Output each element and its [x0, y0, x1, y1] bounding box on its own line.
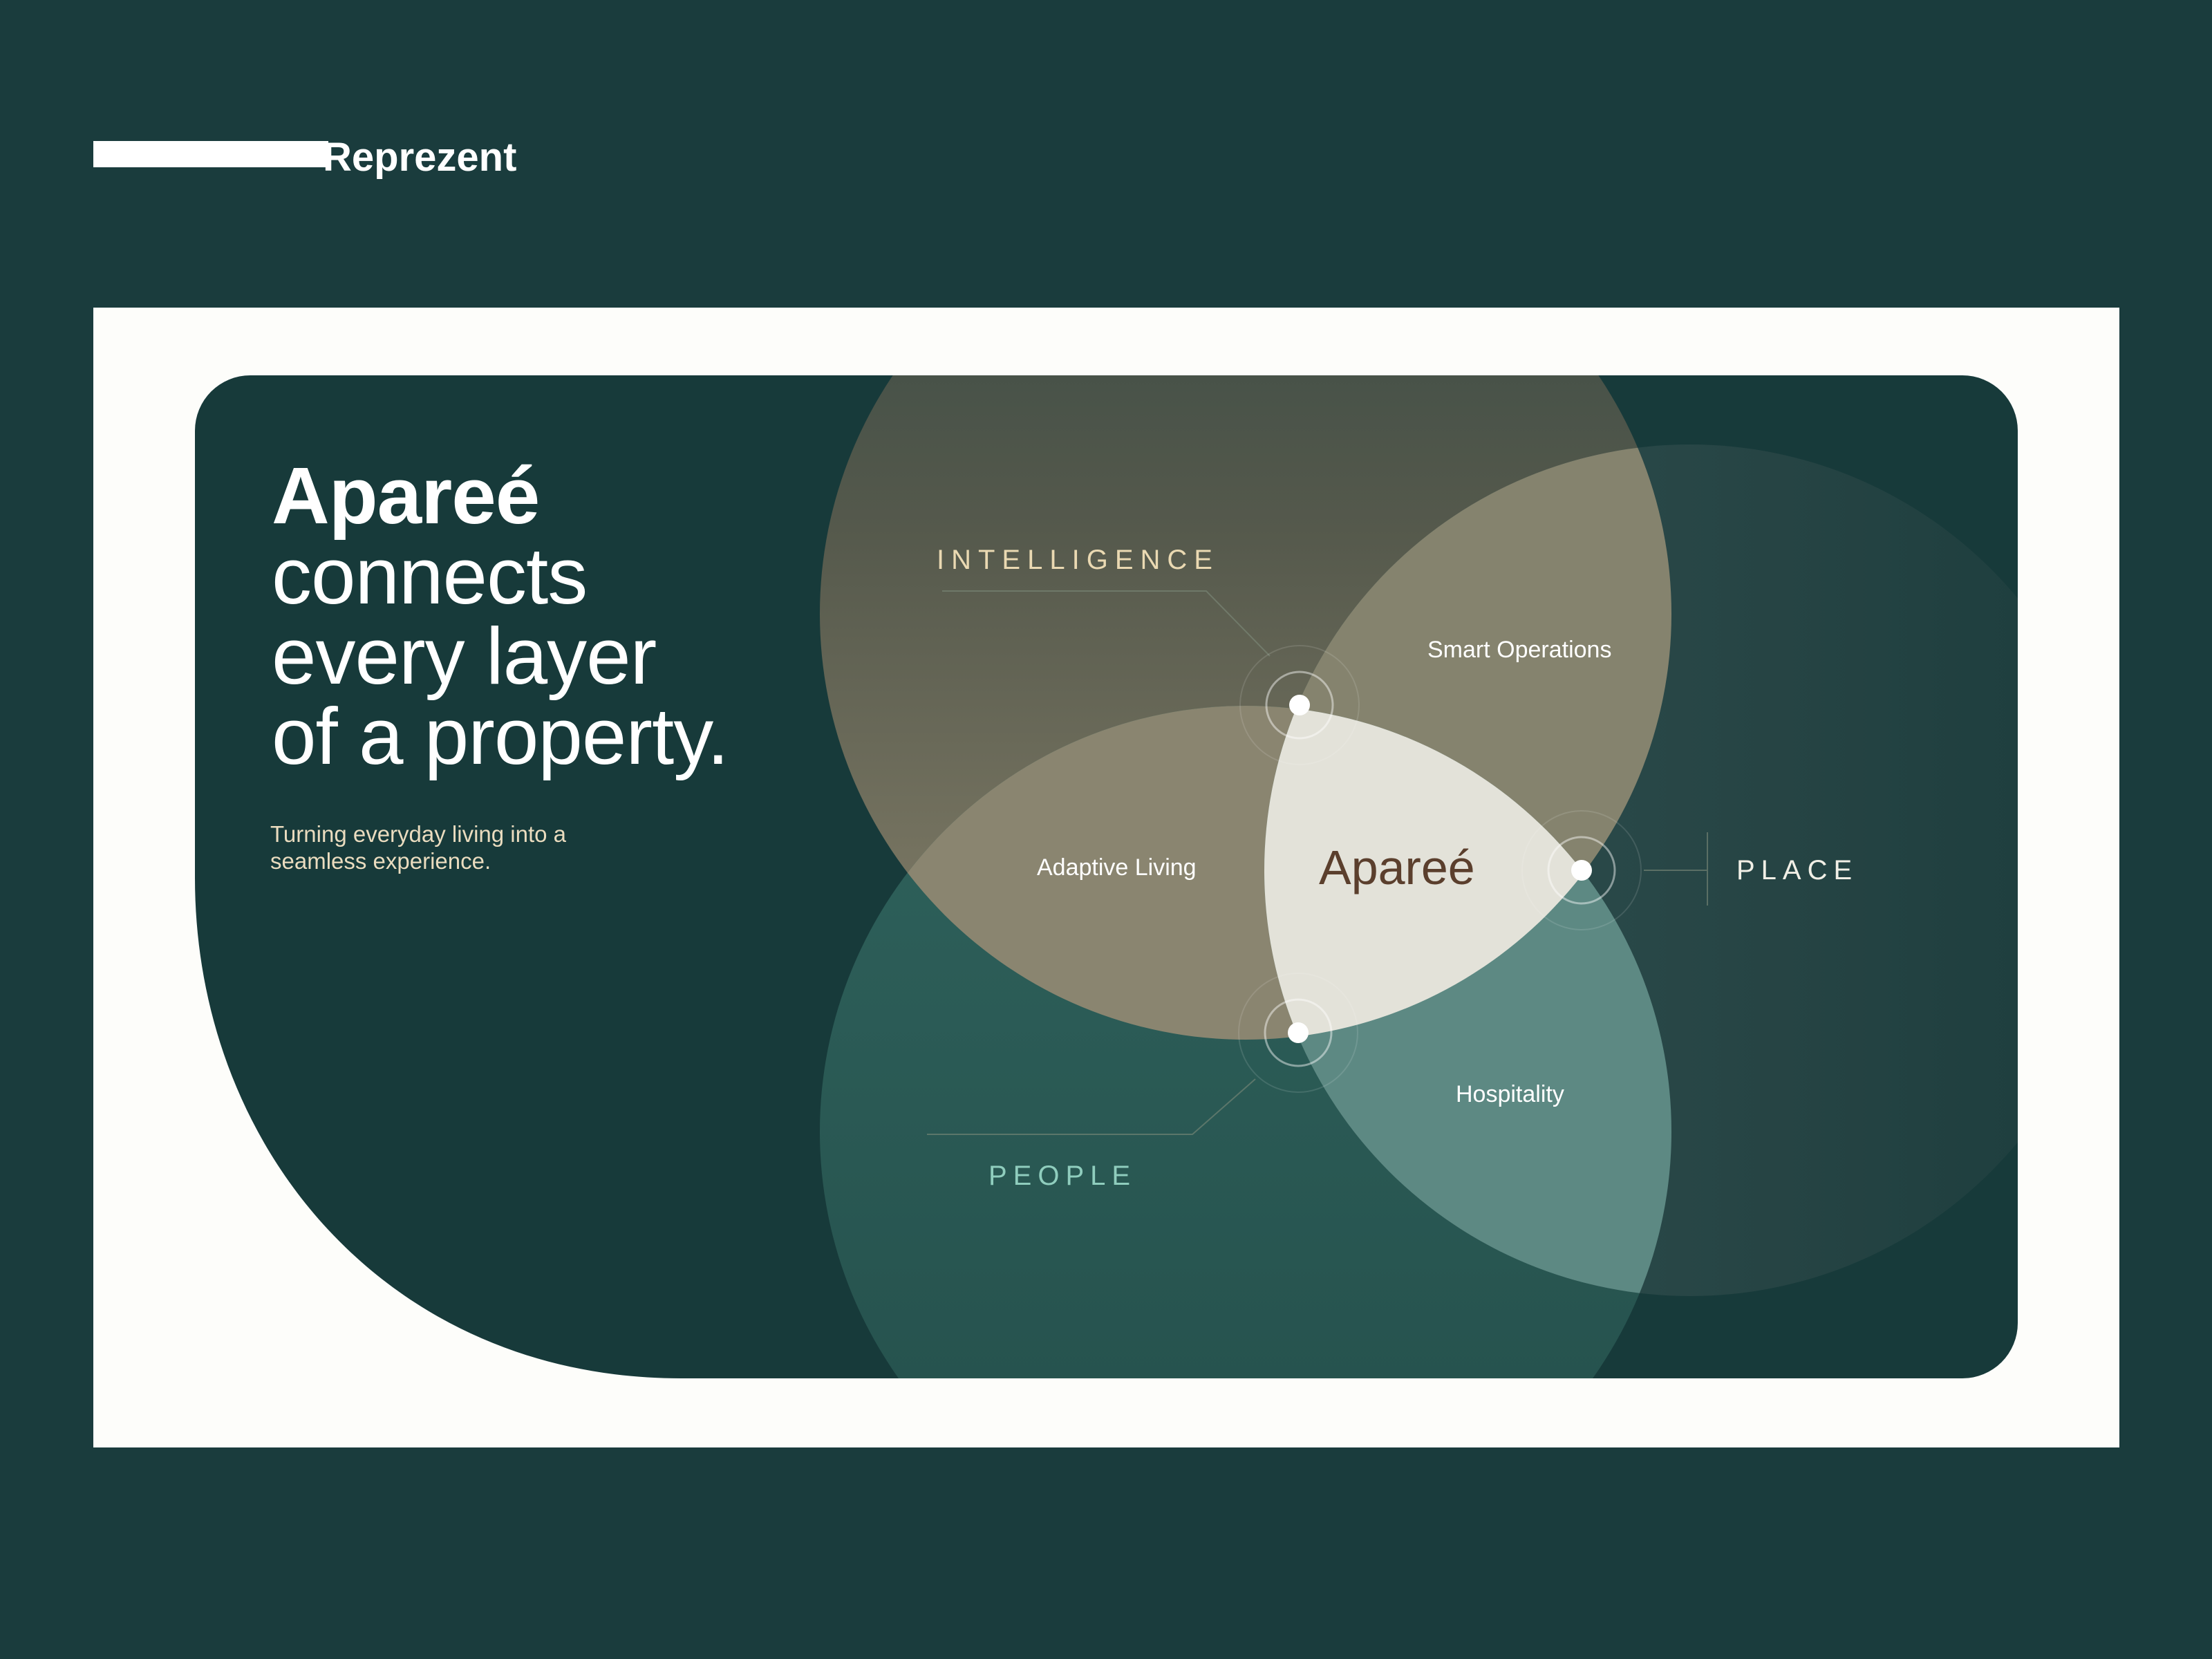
white panel [93, 308, 2119, 1447]
label: intelligence: INTELLIGENCE [937, 545, 1219, 575]
label: place: PLACE [1736, 855, 1858, 885]
subtitle: seamless experience. [270, 848, 491, 874]
headline: connects [272, 531, 587, 621]
connector dots [1239, 646, 1641, 1092]
headline [272, 451, 729, 781]
headline: of a property. [272, 691, 729, 781]
diagram card [195, 375, 2018, 1378]
leader lines [927, 591, 1707, 1134]
logo [93, 135, 516, 180]
logo bar [93, 141, 328, 167]
circle: intelligence [820, 375, 1638, 872]
headline: every layer [272, 611, 656, 701]
circle: people [820, 706, 1640, 1378]
headline: Apareé [272, 451, 539, 541]
label: center brand: Apareé [1319, 841, 1475, 894]
subtitle [270, 821, 567, 874]
logo wordmark: Reprezent [323, 135, 516, 180]
label: people: PEOPLE [988, 1161, 1136, 1191]
label: adaptive living: Adaptive Living [1037, 854, 1197, 881]
circle: place [1302, 444, 2013, 1296]
subtitle: Turning everyday living into a [270, 821, 567, 847]
label: smart operations: Smart Operations [1427, 637, 1611, 663]
label: hospitality: Hospitality [1456, 1081, 1564, 1107]
